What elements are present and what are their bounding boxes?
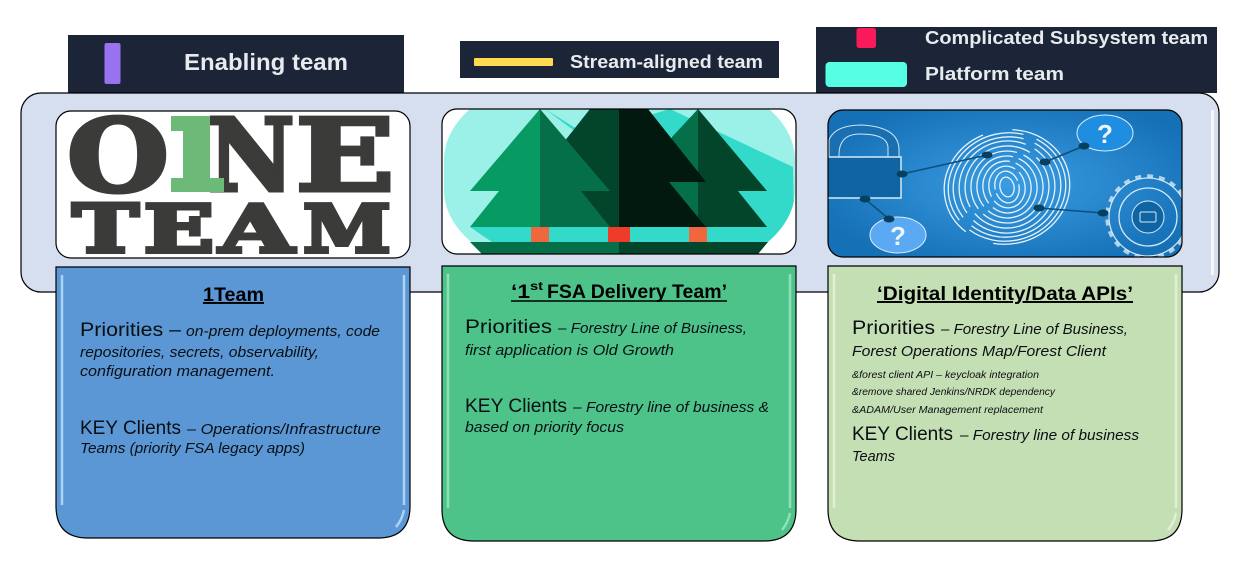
tree: left — [470, 109, 610, 227]
priorities text — [465, 317, 747, 359]
connector lines — [865, 146, 1103, 219]
icon: teal platform marker — [826, 62, 907, 87]
icon: question bubble bottom: ? — [890, 221, 906, 251]
logo word: team — [72, 190, 391, 268]
priorities text: on-prem deployments, code — [186, 324, 380, 340]
icon: yellow stream-aligned marker — [474, 58, 553, 66]
key clients text — [465, 396, 769, 436]
legend: complicated subsystem and platform teams — [816, 27, 1217, 93]
heading: ‘Digital Identity/Data APIs’ — [877, 283, 1133, 305]
ground band — [470, 227, 688, 242]
tree: middle — [560, 109, 706, 227]
label: enabling team: Enabling team — [184, 49, 348, 75]
priorities text: – Forestry Line of Business, — [557, 321, 747, 337]
panel: Digital Identity/Data APIs — [828, 266, 1182, 541]
key clients text — [80, 418, 381, 457]
logo word: one: O — [67, 97, 169, 215]
icon: question bubble top — [1077, 115, 1133, 151]
connector nodes — [860, 142, 1108, 222]
key clients text: – Operations/Infrastructure — [186, 422, 381, 438]
label: platform team: Platform team — [925, 64, 1064, 84]
detail list: &ADAM/User Management replacement — [852, 405, 1044, 416]
logo word: team: E — [144, 190, 214, 268]
priorities text: Priorities — [465, 317, 552, 338]
priorities text: Priorities – — [80, 320, 181, 341]
trunk: middle — [608, 227, 630, 242]
key clients text: – Forestry line of business — [959, 428, 1139, 444]
tree: right — [669, 110, 767, 227]
icon: pink complicated subsystem marker — [856, 28, 876, 48]
key clients text: KEY Clients — [852, 424, 953, 445]
key clients text: – Forestry line of business & — [572, 400, 769, 416]
trunk: right — [689, 227, 707, 242]
priorities text: Priorities — [852, 318, 935, 339]
key clients text: Teams — [852, 449, 895, 465]
icon: padlock — [820, 125, 901, 198]
key clients text: based on priority focus — [465, 420, 624, 436]
heading: 1Team — [203, 284, 264, 306]
label: stream-aligned team: Stream-aligned team — [570, 52, 763, 72]
priorities text — [80, 320, 380, 380]
panel: background band — [21, 93, 1219, 292]
icon: question bubble top: ? — [1097, 119, 1113, 149]
image: one team logo — [56, 97, 410, 268]
icon: question bubble bottom — [870, 217, 926, 253]
panel: 1st FSA Delivery Team — [442, 266, 796, 541]
detail list — [852, 370, 1056, 416]
priorities text: Forest Operations Map/Forest Client — [852, 344, 1107, 360]
trunk: left — [531, 227, 549, 242]
logo word: team: A — [218, 191, 295, 268]
ground base — [470, 242, 768, 254]
detail list: &remove shared Jenkins/NRDK dependency — [852, 387, 1056, 398]
key clients text: KEY Clients — [465, 396, 567, 417]
image: forest illustration — [441, 108, 797, 255]
priorities text — [852, 318, 1128, 360]
key clients text: KEY Clients — [80, 418, 181, 439]
icon: fingerprint — [944, 129, 1070, 245]
panel: 1Team — [56, 267, 410, 538]
logo word: team: M — [303, 191, 391, 268]
heading: ‘1 — [511, 281, 530, 303]
key clients text — [852, 424, 1139, 465]
logo word: team: T — [72, 191, 139, 268]
icon: gear — [1107, 176, 1189, 258]
heading: st — [530, 279, 543, 293]
image: digital identity illustration — [820, 110, 1189, 258]
legend: stream-aligned team — [460, 41, 779, 78]
detail list: &forest client API – keycloak integration — [852, 370, 1039, 381]
legend: enabling team — [68, 35, 404, 93]
priorities text: first application is Old Growth — [465, 343, 674, 359]
heading: FSA Delivery Team’ — [547, 281, 727, 303]
priorities text: configuration management. — [80, 364, 275, 380]
logo word: one: E — [295, 97, 395, 215]
logo word: one — [67, 97, 395, 215]
priorities text: – Forestry Line of Business, — [940, 322, 1128, 338]
logo word: one: N — [208, 97, 294, 215]
label: complicated subsystem team: Complicated Subsystem team — [925, 28, 1208, 48]
icon: purple enabling marker — [104, 43, 120, 84]
key clients text: Teams (priority FSA legacy apps) — [80, 441, 305, 457]
priorities text: repositories, secrets, observability, — [80, 345, 319, 361]
